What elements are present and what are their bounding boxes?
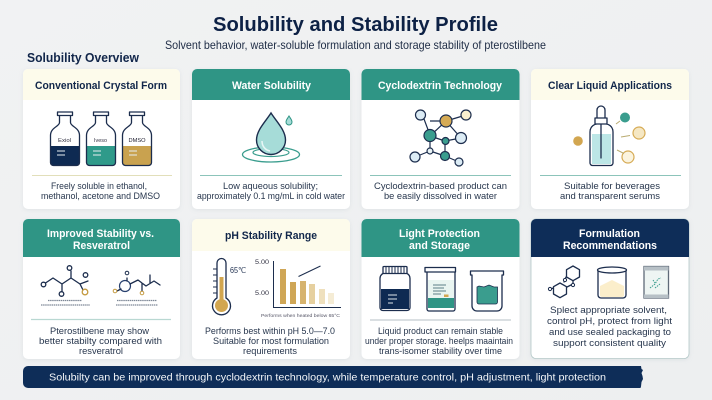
- chart: molecule structures: [41, 266, 160, 305]
- panel: improved stability vs resveratrol: resveratrol: [79, 346, 123, 357]
- panel: water solubility: [192, 69, 350, 209]
- icon: molecular network: [410, 110, 471, 166]
- icon: formulation components: [548, 266, 668, 298]
- icon: three solvent bottles: Iveso: [94, 138, 107, 144]
- panel: conventional crystal form: methanol, acetone and DMSO: [41, 191, 160, 202]
- panel: formulation recommendations: support consistent quality: [553, 338, 666, 349]
- panel: improved stability vs resveratrol: better stabilty compared with: [39, 336, 162, 347]
- panel: pH stability range: pH Stability Range: [225, 230, 317, 242]
- panel: cyclodextrin technology: be easily dissolved in water: [384, 191, 497, 202]
- panel: light protection and storage: trans-isomer stability over time: [379, 346, 502, 357]
- icon: three solvent bottles: [50, 112, 152, 166]
- panel: cyclodextrin technology: [362, 69, 520, 209]
- panel: water solubility: Low aqueous solubility;: [223, 181, 318, 192]
- panel: cyclodextrin technology: Cyclodextrin-based product can: [374, 181, 507, 192]
- icon: thermometer: [213, 258, 246, 315]
- icon: storage containers: [380, 266, 504, 311]
- panel: light protection and storage: and Storage: [409, 240, 470, 252]
- panel: conventional crystal form: Freely soluble in ethanol,: [51, 181, 147, 192]
- panel: light protection and storage: Light Protection: [399, 228, 480, 240]
- bar chart: 5.00: [255, 291, 270, 297]
- bar chart: Performs when heated below 65°C: [261, 313, 341, 319]
- panel: pH stability range: [192, 219, 350, 359]
- panel: formulation recommendations: Formulation: [579, 228, 640, 240]
- callout: summary banner: [23, 366, 643, 388]
- panel: clear liquid applications: [531, 69, 689, 209]
- subtitle: Solvent behavior, water-soluble formulation and storage stability of pterostilbene: [165, 38, 546, 52]
- panel: formulation recommendations: and use sealed packaging to: [549, 327, 671, 338]
- icon: three solvent bottles: DMSO: [128, 138, 146, 144]
- panel: pH stability range: Suitable for most formulation: [213, 336, 329, 347]
- icon: three solvent bottles: Exiol: [58, 138, 71, 144]
- panel: clear liquid applications: Suitable for beverages: [564, 181, 660, 192]
- icon: serum dropper bottle with ingredients: [573, 106, 645, 166]
- panel: light protection and storage: [362, 219, 520, 359]
- bar chart: 5.00: [255, 260, 270, 266]
- panel: water solubility: Water Solubility: [232, 80, 311, 92]
- panel: formulation recommendations: control pH, protect from light: [547, 316, 672, 327]
- panel: conventional crystal form: [23, 69, 180, 209]
- panel: pH stability range: Performs best within pH 5.0—7.0: [205, 326, 335, 337]
- section heading: solubility overview: Solubility Overview: [27, 51, 139, 65]
- panel: water solubility: approximately 0.1 mg/mL in cold water: [197, 191, 345, 202]
- panel: light protection and storage: Liquid product can remain stable: [378, 326, 503, 337]
- panel: clear liquid applications: and transparent serums: [560, 191, 660, 202]
- panel: light protection and storage: under proper storage. heelps maaintain: [365, 336, 513, 347]
- bar chart: [255, 260, 341, 319]
- panel: improved stability vs resveratrol: Pterostilbene may show: [50, 326, 149, 337]
- panel: cyclodextrin technology: Cyclodextrin Technology: [378, 80, 502, 92]
- panel: conventional crystal form: Conventional Crystal Form: [35, 80, 167, 92]
- title: Solubility and Stability Profile: [213, 13, 498, 36]
- panel: improved stability vs resveratrol: Resveratrol: [73, 240, 130, 252]
- panel: formulation recommendations: Splect appropriate solvent,: [550, 305, 667, 316]
- panel: improved stability vs resveratrol: [23, 219, 180, 359]
- panel: pH stability range: requirements: [243, 346, 297, 357]
- panel: clear liquid applications: Clear Liquid Applications: [548, 80, 672, 92]
- icon: water drop: [242, 113, 300, 162]
- icon: thermometer: 65℃: [230, 266, 246, 275]
- panel: formulation recommendations: Recommendations: [563, 240, 657, 252]
- panel: formulation recommendations: [531, 219, 689, 358]
- callout: summary banner: Solubilty can be improved through cyclodextrin technology, while temperature control, pH adjustment, light protection: [49, 372, 606, 384]
- panel: improved stability vs resveratrol: Improved Stability vs.: [47, 228, 154, 240]
